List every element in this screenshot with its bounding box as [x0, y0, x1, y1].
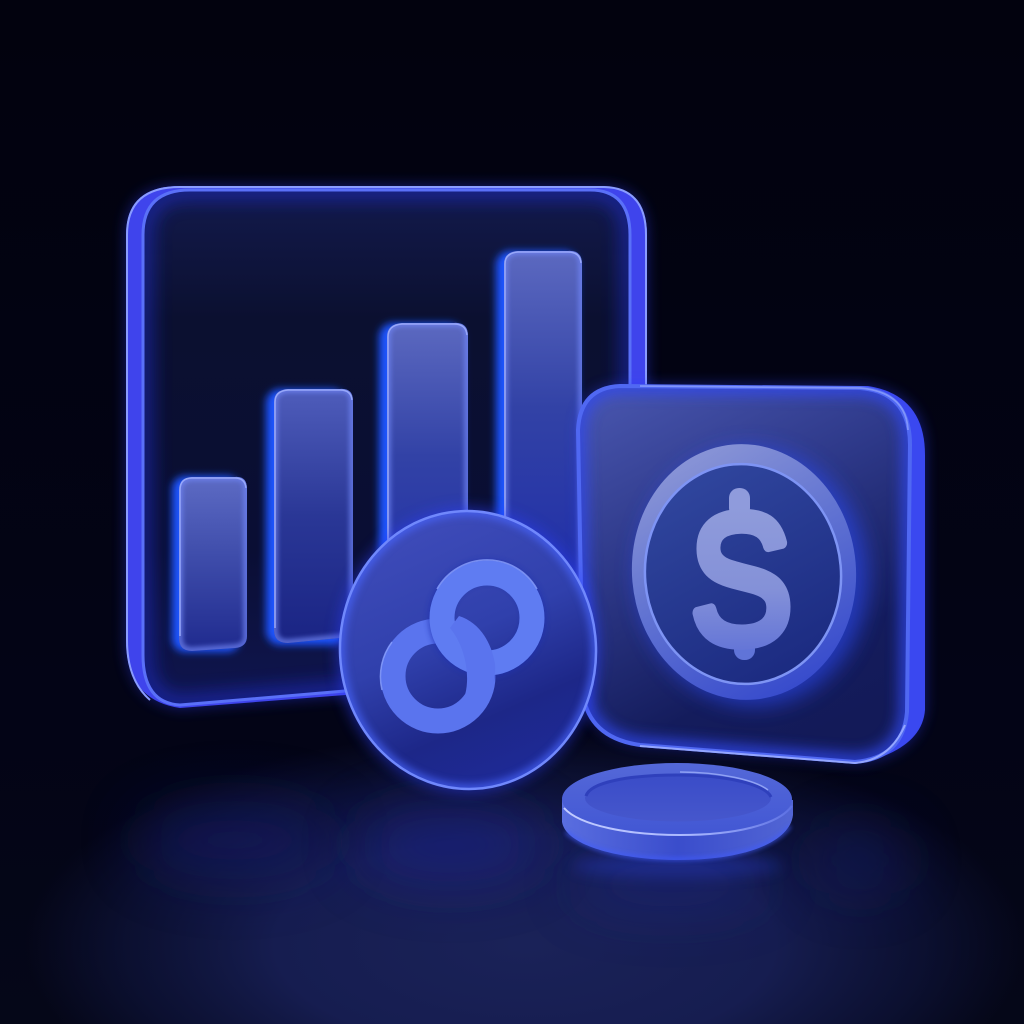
coin top	[562, 763, 792, 835]
card inner glow	[143, 190, 630, 705]
panel: bar chart glass card	[126, 186, 647, 708]
coin reflection	[572, 854, 782, 878]
card edge	[126, 186, 647, 708]
dollar sign: S	[689, 476, 794, 682]
coin glow	[625, 436, 879, 716]
panel: dollar glass card	[578, 385, 925, 763]
disc face	[333, 504, 603, 796]
dollar card inner glow	[578, 386, 910, 762]
disc glow	[337, 508, 599, 792]
dollar card face	[578, 386, 910, 762]
dollar card edge	[840, 386, 925, 763]
card face	[143, 190, 630, 705]
icon: chain link	[380, 560, 537, 732]
bar 4	[496, 251, 582, 600]
card glow	[126, 186, 647, 708]
icon: flat coin	[562, 763, 793, 878]
bar 3	[372, 316, 470, 554]
bar 2	[266, 389, 353, 645]
bar 1	[172, 476, 247, 652]
panel: link glass disc	[333, 504, 603, 796]
coin side	[562, 800, 793, 860]
dollar coin	[621, 435, 867, 709]
dollar card glow	[578, 385, 925, 763]
